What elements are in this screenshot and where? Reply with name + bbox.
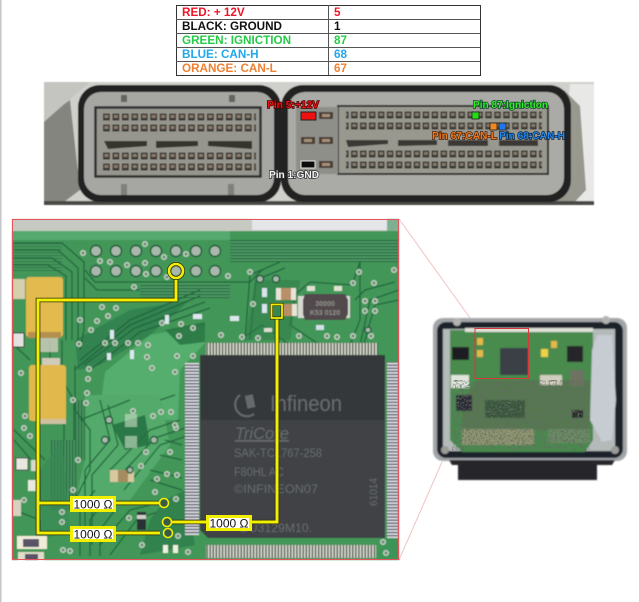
- resistor label 3: 1000 Ω: [210, 516, 249, 530]
- pin 68 marker: [499, 123, 506, 130]
- row: blue: [182, 48, 348, 61]
- page edge strip: [0, 0, 2, 602]
- dense components: [462, 380, 590, 430]
- capacitors: [477, 338, 483, 345]
- yellow wire: upper test point to resistor branches: [38, 264, 183, 533]
- resistor label 2: 1000 Ω: [74, 528, 113, 542]
- chip markings: F80HL AC: [234, 467, 284, 479]
- border: [12, 220, 398, 560]
- chip markings: ©INFINEON07: [234, 484, 318, 496]
- board speckle: [452, 380, 590, 450]
- resistor label 1: 1000 Ω: [74, 498, 113, 512]
- PCB close-up: [12, 219, 399, 560]
- dark trace patches: [165, 322, 205, 345]
- crystal: [298, 296, 350, 318]
- row: orange: [182, 62, 347, 75]
- pin 1 marker: [301, 161, 315, 168]
- row: red: 5: [334, 6, 341, 19]
- trace buses: [230, 240, 399, 262]
- chip markings: 61014: [368, 478, 380, 506]
- row: blue: 68: [334, 48, 348, 61]
- smd parts centre: [110, 470, 134, 482]
- row: blue: BLUE: CAN-H: [182, 48, 259, 61]
- right connector shell: [281, 85, 571, 202]
- light copper zones: [100, 325, 205, 420]
- target box on SMD: [272, 304, 282, 318]
- smd parts left: [13, 279, 25, 299]
- silver gel patch: [590, 335, 616, 442]
- label: pin 5: Pin 5:+12V: [267, 100, 319, 111]
- connector photo: [44, 82, 594, 205]
- top strip: [12, 219, 399, 231]
- row: orange: 67: [334, 62, 347, 75]
- label: pin 68: Pin 68:CAN-H: [499, 131, 565, 142]
- pin 87 marker: [472, 112, 479, 119]
- pin 67 marker: [490, 123, 497, 130]
- test points at chip pads: [160, 498, 172, 538]
- board: [450, 330, 593, 452]
- label: pin 87: Pin 87:Igniction: [473, 100, 548, 111]
- pth holes: [90, 246, 371, 473]
- left connector shell: [78, 85, 281, 202]
- row: black: 1: [334, 20, 341, 33]
- tantalum capacitor 2: [29, 365, 66, 421]
- chip markings: Infineon: [270, 391, 342, 416]
- pin 5 marker: [301, 112, 316, 120]
- row: red: RED: + 12V: [182, 6, 245, 19]
- main chip: [500, 348, 528, 375]
- row: black: BLACK: GROUND: [182, 20, 282, 33]
- ECU overview photo: [433, 316, 627, 480]
- logo: [235, 395, 254, 416]
- row: red: [182, 6, 341, 19]
- QFP leads: [206, 343, 378, 356]
- QFP body: [200, 355, 385, 538]
- housing lugs: [453, 318, 461, 326]
- row: black: [182, 20, 341, 33]
- test point: 12V pad: [169, 264, 183, 278]
- row: green: [182, 34, 347, 47]
- yellow wire: SMD pad to chip pad: [172, 304, 282, 522]
- chip markings: SAK-TC1767-258: [234, 448, 322, 460]
- vias: [19, 242, 396, 555]
- ics: [452, 347, 469, 360]
- chip markings: [234, 391, 380, 535]
- housing: [433, 318, 627, 461]
- zoom guide lines: [399, 219, 470, 560]
- label: pin 67: Pin 67:CAN-L: [432, 131, 497, 142]
- table: wire colour to pin number: [176, 5, 480, 76]
- row: green: GREEN: IGNICTION: [182, 34, 291, 47]
- smd parts top right: [276, 288, 295, 300]
- PCB close-up: 30000: [315, 301, 335, 308]
- inset red box: [475, 328, 528, 378]
- connector: [449, 460, 615, 480]
- tantalum capacitor 1: [26, 277, 63, 337]
- chip markings: DU3129M10.: [240, 523, 312, 535]
- PCB close-up: K53 0120: [310, 310, 340, 317]
- row: orange: ORANGE: CAN-L: [182, 62, 277, 75]
- row: green: 87: [334, 34, 347, 47]
- label: pin 1: Pin 1:GND: [269, 170, 319, 181]
- chip markings: TriCore: [235, 424, 289, 443]
